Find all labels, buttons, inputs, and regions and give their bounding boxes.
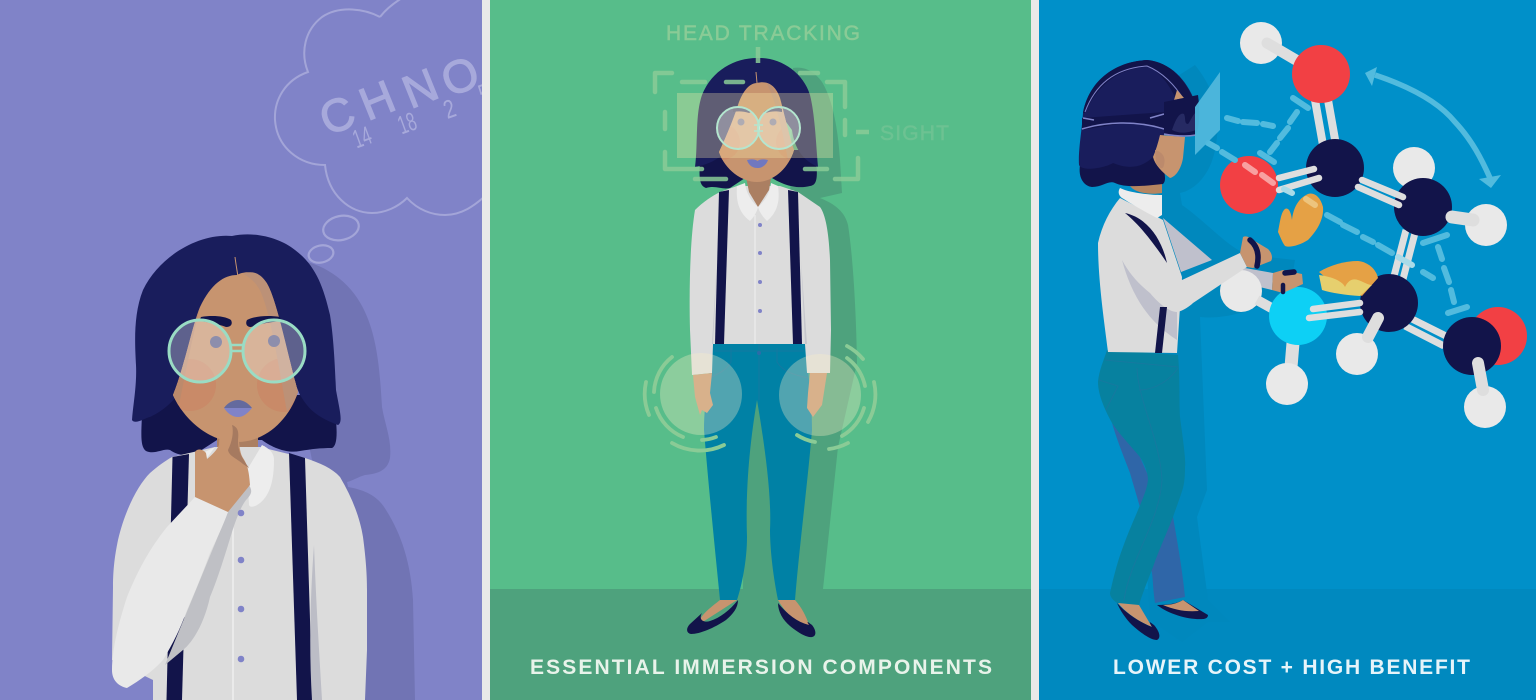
thought cloud with chemical formula: 18 [393,106,421,140]
floor [490,589,1031,700]
hand with finger on chin [195,439,250,512]
cheeks [173,360,298,412]
front arm [1122,240,1247,312]
eyes [738,118,744,126]
character shadow [1130,65,1295,642]
thought cloud with chemical formula: 5 [474,77,495,109]
sleeve shadow [165,484,251,665]
vibration arcs [645,346,875,451]
thought cloud with chemical formula [275,0,495,265]
glasses [717,107,800,149]
thought cloud with chemical formula: C [312,85,362,145]
shirt [690,186,831,375]
buttons [238,510,244,662]
face shade [243,272,298,412]
molecule: balls and bonds [1220,22,1527,428]
front shoe [1118,603,1152,627]
thought cloud with chemical formula: N [395,58,445,118]
eyebrows [733,108,751,113]
floor [1039,589,1536,700]
collar [1119,188,1162,218]
headset strap [1082,112,1165,130]
mouth [224,400,252,408]
woman in headset [1079,60,1303,640]
neck [217,438,258,447]
shoes [700,600,737,622]
thought cloud with chemical formula: 2 [439,93,460,125]
face [719,82,794,182]
eyebrows [199,316,232,327]
thought cloud with chemical formula: 14 [348,120,376,154]
glasses [169,320,305,382]
main hair [132,234,341,425]
collar [247,445,274,507]
character shadow [743,68,857,589]
visor projection pane [1195,72,1220,155]
panel: lower cost plus high benefit [1039,0,1536,700]
pants [704,343,812,600]
woman portrait [112,234,367,700]
suspenders [715,190,729,344]
hair strand [235,257,238,277]
shirt [112,447,367,700]
hand vibration circles [660,353,861,436]
face [173,272,298,442]
front leg [1098,350,1185,605]
caption: lower cost plus high benefit: LOWER COST + HIGH BENEFIT [1113,656,1470,679]
back shoe [1157,600,1208,619]
sleeve shade [1122,260,1177,340]
main hair [695,58,818,167]
skin sliver above visor [1174,90,1184,100]
dashes crossing molecule [1245,165,1412,265]
back forearm [1230,268,1273,290]
pants stitching [1099,360,1178,600]
orange virtual hand top [1278,194,1323,247]
hand one with controller [1240,236,1272,268]
hands [693,373,713,415]
suspenders [166,454,189,700]
back hair [141,395,337,455]
double arrow [1365,67,1501,188]
finger shade [228,425,249,468]
face [1153,135,1185,178]
thought cloud with chemical formula: H [352,70,402,130]
hair strand [756,72,757,83]
eyes [210,336,222,348]
sleeve seams [712,270,807,344]
head tracking label: HEAD TRACKING [666,22,860,45]
thought cloud with chemical formula: O [434,45,486,107]
back leg [1112,423,1185,603]
sleeve [112,497,228,688]
shirt placket [232,520,234,700]
placket [754,215,756,344]
panel: curiosity, woman thinking of a formula [0,0,495,700]
suspender crescent [1125,213,1167,263]
dashed guide lines [1208,98,1467,313]
orange and yellow virtual hand lower [1319,261,1378,296]
mouth [747,159,768,168]
back upper arm [1163,218,1212,272]
hand two with controller [1272,270,1303,293]
headset visor [1164,95,1199,136]
shirt crease [310,545,322,700]
pants details [710,343,808,400]
neck [746,178,771,207]
helmet rim [1083,60,1197,113]
back hair [700,150,817,188]
shirt buttons [758,223,762,313]
character shadow [300,262,415,700]
torso [1098,198,1182,353]
head tracking brackets [655,47,869,179]
woman standing [687,58,831,637]
collar [737,183,758,221]
sight overlay rectangle [677,93,833,158]
suspender lower [1155,307,1167,353]
cheeks and face shade [704,82,812,160]
caption: essential immersion components: ESSENTIAL IMMERSION COMPONENTS [530,656,992,679]
panel: essential immersion components [490,0,1031,700]
hair and helmet [1079,60,1195,169]
sight label: SIGHT [880,122,949,145]
neck [1130,178,1162,194]
back hair [1080,150,1165,187]
